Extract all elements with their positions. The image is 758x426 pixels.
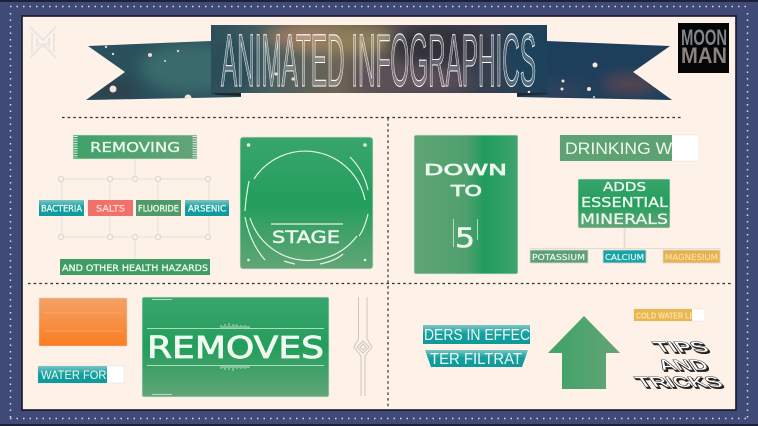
potassium label — [530, 250, 588, 263]
panel: drinking water title — [560, 135, 717, 161]
salts label — [88, 200, 133, 216]
potassium label: POTASSIUM — [532, 253, 585, 262]
minerals box: MINERALS — [580, 212, 668, 228]
tips and tricks extrusion shadow: AND — [655, 358, 715, 375]
mineral connectors — [530, 228, 720, 248]
removing heading — [73, 135, 197, 159]
icon: faint left logo mark — [30, 27, 56, 58]
down to text: DOWN — [424, 161, 507, 179]
fluoride label: FLUORIDE — [138, 204, 179, 214]
bacteria label — [39, 200, 84, 216]
removing heading: REMOVING — [90, 140, 180, 156]
panel: orange title box — [39, 298, 127, 346]
stage circular ornament — [245, 151, 368, 264]
panel: water for label: WATER FOR LIFE — [41, 368, 133, 382]
removes ornaments — [147, 300, 324, 394]
other hazards label — [60, 259, 210, 275]
panel: removes — [142, 297, 329, 397]
panel: drinking water title: DRINKING WATER — [565, 139, 717, 158]
tips and tricks face: TIPS — [649, 339, 713, 356]
ribbon left tail — [86, 41, 241, 100]
ribbon right tail — [517, 41, 672, 100]
bacteria label: BACTERIA — [41, 204, 82, 214]
tips and tricks face: TRICKS — [631, 374, 727, 391]
panel: removing flow chart — [39, 135, 229, 275]
calcium label — [603, 250, 646, 263]
tips and tricks face — [631, 339, 727, 391]
arsenic label: ARSENIC — [188, 204, 226, 214]
removes text: REMOVES — [147, 331, 324, 366]
icon: Moon Man logo: MOON — [681, 25, 727, 50]
panel: teal scrolling captions — [423, 325, 530, 368]
panel: cold water label: COLD WATER LEVEL — [636, 310, 708, 320]
minerals box: ADDS — [603, 179, 646, 194]
minerals box: ESSENTIAL — [581, 196, 669, 211]
magnesium label: MAGNESIUM — [665, 253, 718, 262]
tips and tricks extrusion shadow: TIPS — [651, 340, 715, 357]
down to text: TO — [450, 182, 482, 200]
stage label: STAGE — [272, 228, 340, 248]
ribbon fold shadows — [211, 93, 547, 96]
caption: water filtration: TER FILTRAT — [430, 351, 523, 368]
magnesium label — [663, 250, 720, 263]
stage corner rivets — [247, 143, 367, 261]
icon: Moon Man logo — [678, 23, 729, 73]
arsenic label — [185, 200, 229, 216]
icon: green up arrow — [548, 316, 620, 389]
tips and tricks 3D text — [631, 339, 729, 392]
panel: down to 5 — [414, 135, 518, 274]
tips and tricks extrusion shadow — [633, 340, 729, 392]
fluoride label — [136, 200, 181, 216]
down to text — [424, 161, 507, 200]
panel: adds essential minerals — [530, 179, 720, 263]
number 5: 5 — [455, 223, 475, 254]
tips and tricks extrusion shadow: TRICKS — [633, 375, 729, 392]
ribbon centre band — [209, 25, 554, 93]
minerals box — [578, 179, 670, 228]
title ribbon banner — [86, 25, 672, 100]
icon: Moon Man logo: MAN — [681, 43, 727, 68]
other hazards label: AND OTHER HEALTH HAZARDS — [62, 264, 208, 274]
caption: orders in effect: DERS IN EFFEC — [424, 327, 530, 344]
panel: stage — [240, 137, 373, 269]
panel: cold water label — [634, 309, 708, 321]
calcium label: CALCIUM — [605, 253, 644, 262]
tips and tricks face: AND — [653, 357, 713, 374]
slider ornament — [354, 297, 372, 396]
salts label: SALTS — [96, 204, 125, 214]
chart connectors — [58, 159, 211, 259]
dotted section dividers — [28, 118, 731, 408]
